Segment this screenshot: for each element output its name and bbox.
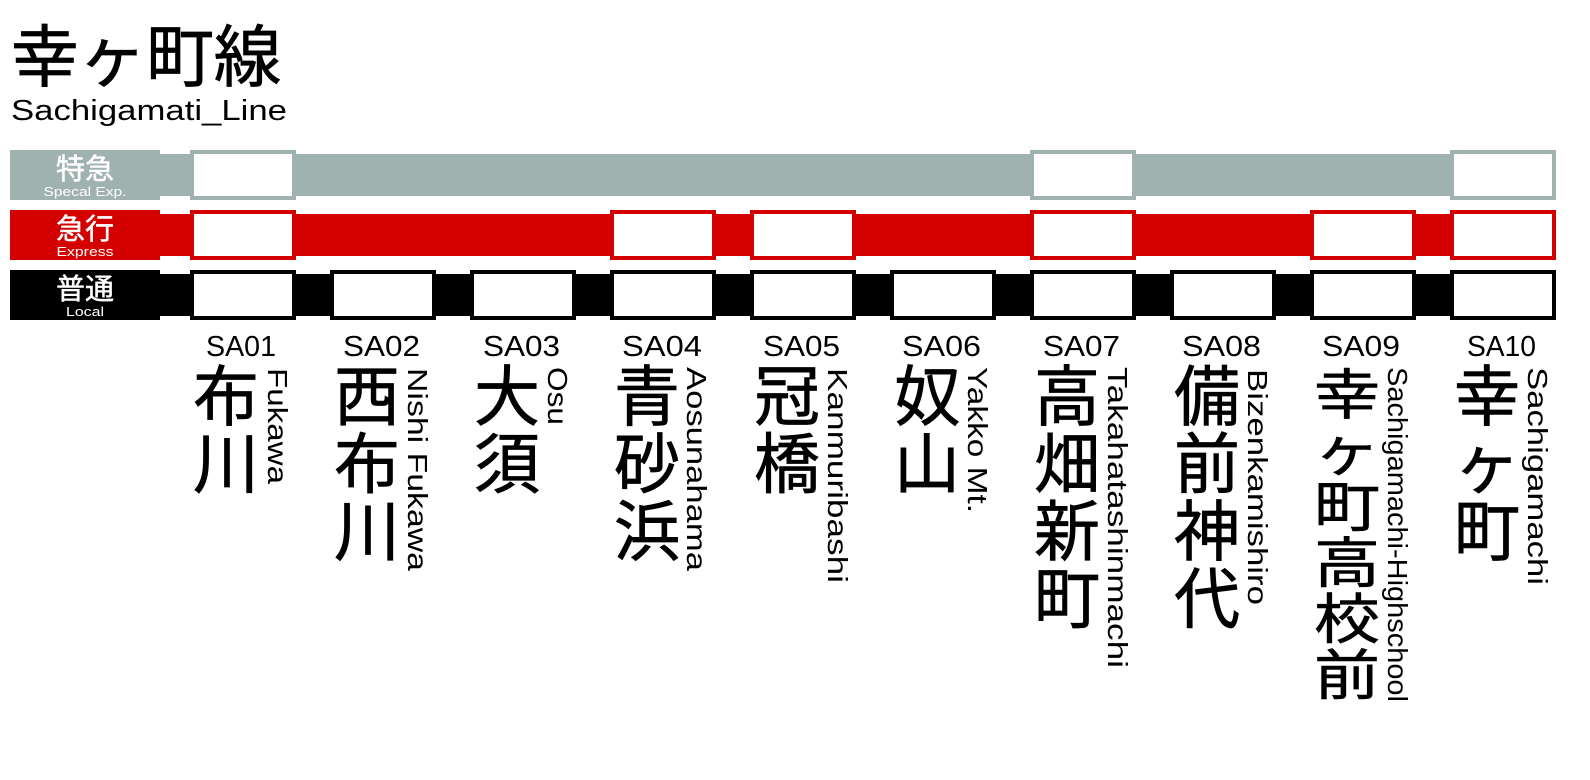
legend label: local	[10, 270, 160, 320]
stops: express	[192, 212, 1554, 258]
station SA01: 川	[193, 428, 259, 502]
line: special express	[160, 154, 1550, 196]
line: express	[160, 214, 1550, 256]
station SA01: 布	[193, 360, 259, 434]
legend label: express: Express	[56, 244, 114, 259]
station SA07	[1034, 331, 1133, 668]
station SA09	[1314, 331, 1413, 706]
legend label: express: 急行	[56, 213, 114, 246]
station SA07: 高	[1034, 360, 1100, 434]
station SA03: 大	[474, 360, 540, 434]
stops: special express	[192, 152, 1554, 198]
station SA08: 神	[1174, 495, 1240, 569]
legend label: special express: 特急	[56, 153, 114, 186]
station SA02: SA02	[343, 331, 420, 363]
title: 幸ヶ町線	[11, 21, 281, 96]
station SA10: SA10	[1467, 331, 1536, 363]
station SA03	[474, 331, 573, 502]
row: express	[10, 210, 1554, 260]
station SA04: 浜	[614, 495, 680, 569]
station SA03: 須	[474, 428, 540, 502]
legend label: express	[10, 210, 160, 260]
station SA08: 代	[1174, 562, 1240, 636]
station SA10: ヶ	[1454, 428, 1520, 502]
station SA07: 畑	[1034, 428, 1100, 502]
station SA10: 幸	[1454, 360, 1520, 434]
station SA03: Osu	[542, 367, 573, 425]
station SA09: 高	[1314, 533, 1380, 594]
station SA06: SA06	[902, 331, 981, 363]
station SA07: SA07	[1043, 331, 1120, 363]
station SA07: 新	[1034, 495, 1100, 569]
station SA09: ヶ	[1314, 421, 1380, 482]
station SA02: 布	[334, 428, 400, 502]
station SA08: 備	[1174, 360, 1240, 434]
station SA06: Yakko Mt.	[962, 367, 993, 513]
station SA02: 西	[334, 360, 400, 434]
station SA03: SA03	[483, 331, 560, 363]
legend label: special express: Specal Exp.	[44, 184, 126, 199]
station SA04: 青	[614, 360, 680, 434]
station SA05: 冠	[754, 360, 820, 434]
station SA02: 川	[334, 495, 400, 569]
legend label: local: 普通	[56, 273, 114, 306]
station SA08: 前	[1174, 428, 1240, 502]
line: local	[160, 274, 1550, 316]
station SA01	[193, 331, 293, 502]
station SA06: 山	[894, 428, 960, 502]
stops: local	[192, 272, 1554, 318]
station SA04: 砂	[614, 428, 680, 502]
station SA05	[754, 331, 853, 583]
station SA07: Takahatashinmachi	[1102, 367, 1133, 668]
station SA09: 幸	[1314, 364, 1380, 426]
subtitle: Sachigamati_Line	[11, 95, 287, 127]
station SA07: 町	[1034, 562, 1100, 636]
station SA05: 橋	[754, 428, 820, 502]
station SA10	[1454, 331, 1553, 585]
row: special express	[10, 150, 1554, 200]
station SA05: SA05	[763, 331, 840, 363]
station SA10: Sachigamachi	[1522, 367, 1553, 585]
station SA09: Sachigamachi-Highschool	[1382, 367, 1413, 702]
station SA04	[614, 331, 712, 572]
station SA09: 前	[1314, 645, 1380, 706]
station SA02: Nishi Fukawa	[402, 368, 433, 572]
station SA02	[334, 331, 433, 572]
station SA10: 町	[1454, 495, 1520, 569]
station SA09: SA09	[1322, 331, 1400, 363]
station SA08: SA08	[1182, 331, 1261, 363]
station SA08: Bizenkamishiro	[1242, 369, 1273, 605]
station SA04: Aosunahama	[681, 367, 712, 572]
station SA08	[1174, 331, 1273, 636]
station SA09: 校	[1314, 589, 1380, 650]
station SA04: SA04	[622, 331, 702, 363]
station SA09: 町	[1314, 477, 1380, 538]
station SA06	[894, 331, 993, 513]
legend label: special express	[10, 150, 160, 200]
legend label: local: Local	[66, 304, 104, 319]
station SA05: Kanmuribashi	[822, 368, 853, 583]
station SA01: Fukawa	[262, 368, 293, 484]
station SA06: 奴	[894, 360, 960, 434]
row: local	[10, 270, 1554, 320]
station SA01: SA01	[206, 331, 276, 363]
